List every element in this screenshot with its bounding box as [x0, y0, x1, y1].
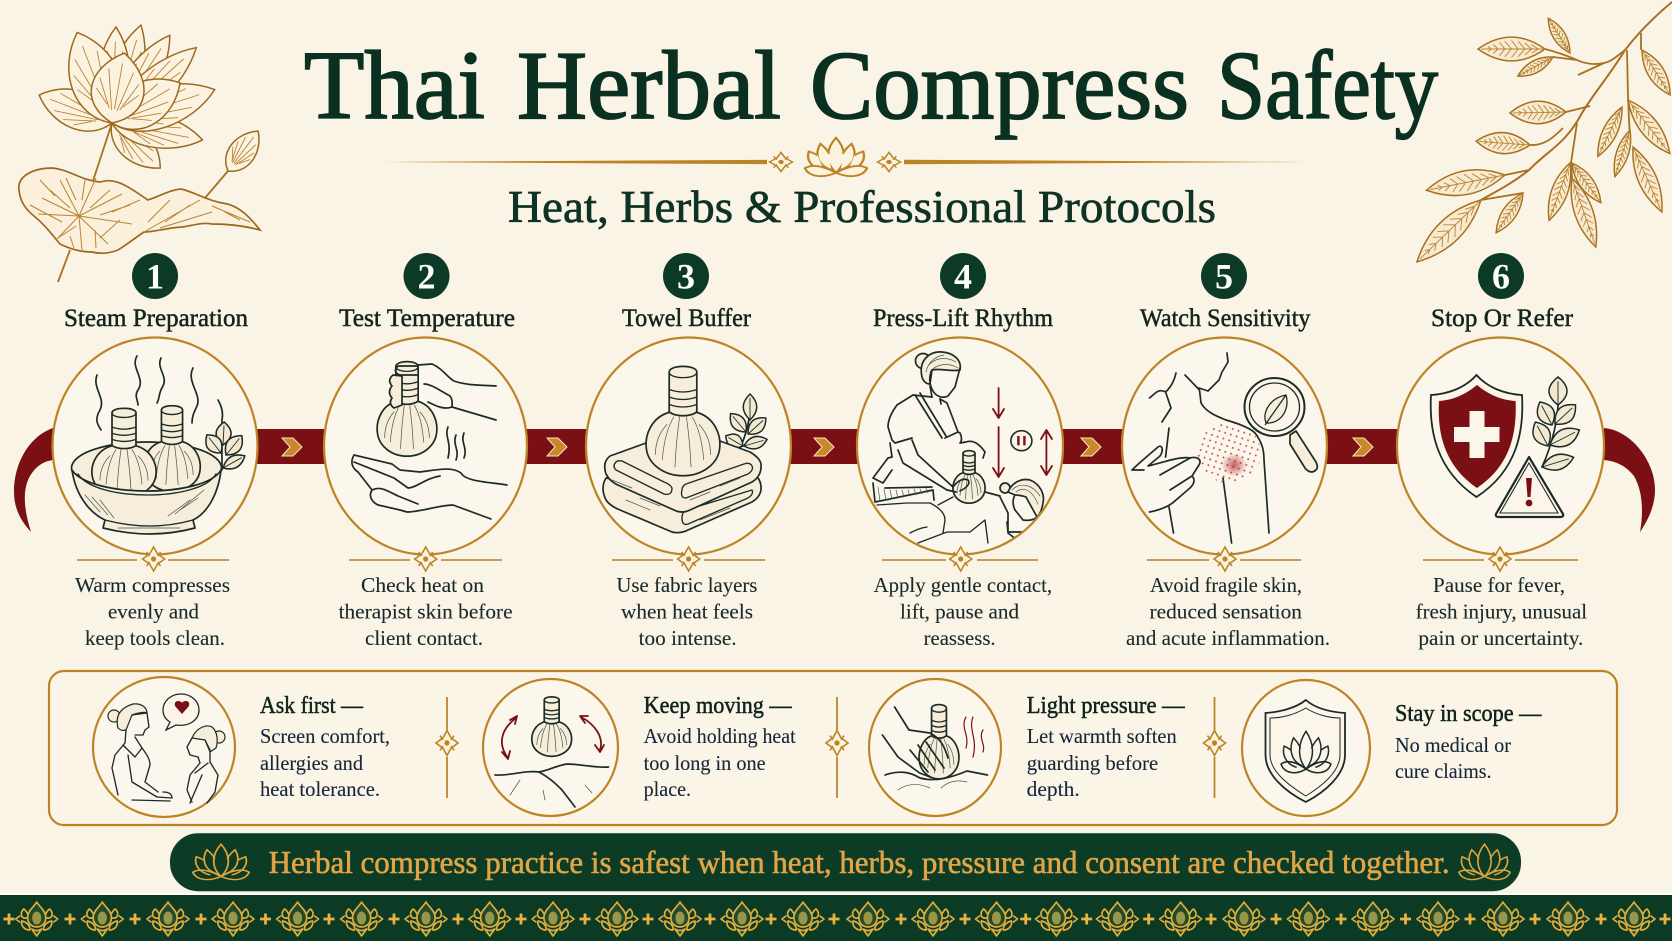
vertical divider ornament [1204, 697, 1226, 798]
keep moving body: too long in one [644, 751, 766, 775]
step 5 illustration: skin check with magnifier [1122, 338, 1327, 554]
number badge 5 [1201, 253, 1247, 299]
step 5 description: Avoid fragile skin, [1150, 573, 1302, 597]
number badge 3: 3 [677, 256, 695, 296]
step 2 description: therapist skin before [339, 600, 513, 624]
step 3: towel buffer [586, 253, 791, 650]
keep moving body [644, 724, 796, 801]
reminder: ask first [93, 677, 390, 817]
step 4 heading: Press-Lift Rhythm [873, 305, 1054, 332]
ask first body: allergies and [260, 751, 363, 775]
step 2 description [339, 573, 513, 650]
step 2 description: Check heat on [361, 573, 484, 597]
panel: practice reminders [49, 671, 1617, 825]
title: Herbal [517, 32, 781, 140]
step 4 description: reassess. [924, 626, 996, 650]
number badge 6: 6 [1492, 256, 1510, 296]
step 6 description: fresh injury, unusual [1416, 600, 1587, 624]
keep moving heading: Keep moving — [644, 693, 793, 719]
step 2 divider ornament [349, 547, 502, 571]
vertical divider ornament [826, 697, 848, 798]
keep moving body: Avoid holding heat [644, 724, 796, 748]
number badge 3 [663, 253, 709, 299]
step 1 illustration: compresses steaming in a bowl [52, 338, 258, 554]
step 1 heading: Steam Preparation [64, 305, 248, 332]
subtitle: Heat, Herbs & Professional Protocols [508, 182, 1216, 232]
step 5 description: and acute inflammation. [1126, 626, 1330, 650]
title: Safety [1217, 32, 1438, 140]
step 1: steam preparation [52, 253, 258, 650]
step 5: watch sensitivity [1122, 253, 1330, 650]
icon: hand pressing compress [869, 679, 1001, 816]
number badge 2: 2 [418, 256, 436, 296]
step 6 description: Pause for fever, [1433, 573, 1565, 597]
light pressure body [1027, 724, 1177, 801]
title: Thai [304, 32, 485, 140]
step 2 illustration: hands testing compress heat [324, 338, 527, 554]
light pressure heading: Light pressure — [1027, 693, 1186, 719]
step 5 description: reduced sensation [1150, 600, 1302, 624]
stay in scope body: cure claims. [1395, 759, 1492, 783]
step 6 heading: Stop Or Refer [1431, 305, 1574, 332]
reminder: keep moving [483, 679, 796, 816]
step 2: test temperature [324, 253, 527, 650]
stay in scope heading: Stay in scope — [1395, 701, 1542, 727]
icon: lotus left [193, 844, 249, 880]
step 3 divider ornament [612, 547, 765, 571]
step 1 description: Warm compresses [75, 573, 230, 597]
step 6: stop or refer [1397, 253, 1604, 650]
step 6 divider ornament [1423, 547, 1578, 571]
step 3 description: Use fabric layers [616, 573, 757, 597]
step 4 description: Apply gentle contact, [874, 573, 1052, 597]
step 4 divider ornament [882, 547, 1038, 571]
step 1 divider ornament [77, 547, 229, 571]
ribbon connecting the steps [14, 428, 1655, 532]
stay in scope body: No medical or [1395, 733, 1511, 757]
step 3 description: too intense. [639, 626, 737, 650]
step 4 description: lift, pause and [900, 600, 1019, 624]
ask first body: heat tolerance. [260, 777, 380, 801]
takeaway banner [170, 833, 1522, 892]
number badge 1: 1 [146, 256, 164, 296]
ask first body: Screen comfort, [260, 724, 390, 748]
step 1 description: evenly and [108, 600, 199, 624]
step 1 description: keep tools clean. [85, 626, 225, 650]
step 5 heading: Watch Sensitivity [1140, 305, 1311, 332]
ask first heading: Ask first — [260, 693, 364, 719]
illustration: herb branch [1409, 2, 1672, 270]
footer ornament band [0, 893, 1672, 941]
number badge 4: 4 [954, 256, 972, 296]
step 3 description [616, 573, 757, 650]
light pressure body: Let warmth soften [1027, 724, 1177, 748]
light pressure body: guarding before [1027, 751, 1158, 775]
icon: lotus right [1459, 844, 1510, 880]
illustration: lotus flower, leaf and bud [19, 21, 269, 282]
banner text: Herbal compress practice is safest when heat, herbs, pressure and consent are checked together. [269, 844, 1450, 880]
reminder: light pressure [869, 679, 1186, 816]
reminder: stay in scope [1242, 680, 1542, 816]
step 4 illustration: therapist pressing compress on client [857, 338, 1063, 554]
step 6 description: pain or uncertainty. [1418, 626, 1583, 650]
ask first body [260, 724, 390, 801]
icon: two women talking with heart bubble [93, 677, 235, 817]
number badge 5: 5 [1215, 256, 1233, 296]
light pressure body: depth. [1027, 777, 1080, 801]
number badge 4 [940, 253, 986, 299]
step 3 heading: Towel Buffer [622, 305, 752, 332]
step 3 description: when heat feels [621, 600, 753, 624]
step 6 description [1416, 573, 1587, 650]
step 1 description [75, 573, 230, 650]
number badge 6 [1478, 253, 1524, 299]
title [304, 32, 1438, 140]
step 4 description [874, 573, 1052, 650]
step 4: press-lift rhythm [857, 253, 1063, 650]
stay in scope body [1395, 733, 1511, 783]
step 6 illustration: shield, warning and herb [1397, 338, 1604, 554]
icon: compress with motion arrows [483, 679, 618, 816]
step 3 illustration: compress on folded towels [586, 338, 791, 554]
step 2 heading: Test Temperature [339, 305, 515, 332]
keep moving body: place. [644, 777, 691, 801]
icon: lotus shield [1242, 680, 1370, 816]
title divider with lotus [378, 138, 1305, 176]
step 5 divider ornament [1147, 547, 1301, 571]
vertical divider ornament [436, 697, 458, 798]
number badge 2 [404, 253, 450, 299]
title: Compress [810, 32, 1189, 140]
step 5 description [1126, 573, 1330, 650]
step 2 description: client contact. [365, 626, 483, 650]
number badge 1 [132, 253, 178, 299]
